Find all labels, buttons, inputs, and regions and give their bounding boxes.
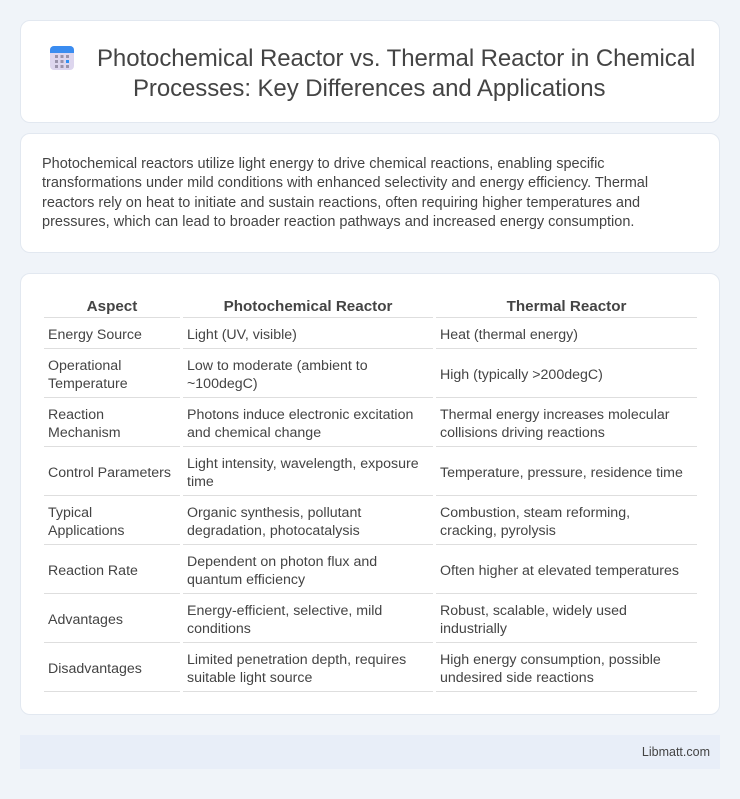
row: reaction mechanism: Photons induce electronic excitation (187, 407, 413, 423)
row: disadvantages: undesired side reactions (440, 670, 594, 686)
row: reaction mechanism: and chemical change (187, 425, 321, 441)
icon: calendar grid (50, 46, 74, 70)
row: reaction mechanism: collisions driving reactions (440, 425, 605, 441)
row: typical applications: Organic synthesis, pollutant (187, 505, 361, 521)
row: disadvantages: Disadvantages (48, 661, 142, 677)
row: advantages: Advantages (48, 612, 123, 628)
row: reaction rate (44, 554, 697, 594)
comparison table (44, 298, 697, 692)
row: typical applications (44, 505, 697, 545)
row: reaction mechanism: Reaction (48, 407, 104, 423)
row: control parameters: Light intensity, wavelength, exposure (187, 456, 419, 472)
table header (44, 298, 697, 318)
row: operational temperature: ~100degC) (187, 376, 258, 392)
row: reaction mechanism: Thermal energy increases molecular (440, 407, 669, 423)
row: reaction rate: Dependent on photon flux and (187, 554, 377, 570)
row: operational temperature (44, 358, 697, 398)
row: typical applications: Combustion, steam reforming, (440, 505, 630, 521)
summary text: Photochemical reactors utilize light energy to drive chemical reactions, enabling specific (42, 156, 605, 172)
row: control parameters: Control Parameters (48, 465, 171, 481)
row: typical applications: Applications (48, 523, 125, 539)
row: advantages: conditions (187, 621, 251, 637)
row: reaction mechanism: Mechanism (48, 425, 121, 441)
row: typical applications: cracking, pyrolysis (440, 523, 556, 539)
title: Processes: Key Differences and Applications (133, 75, 605, 102)
row: disadvantages: Limited penetration depth, requires (187, 652, 406, 668)
row: energy source: Light (UV, visible) (187, 327, 297, 343)
summary card (20, 133, 720, 253)
row: operational temperature: Low to moderate (ambient to (187, 358, 368, 374)
row: disadvantages: suitable light source (187, 670, 312, 686)
title (97, 45, 695, 102)
table header: Photochemical Reactor (224, 298, 392, 315)
row: control parameters: Temperature, pressure, residence time (440, 465, 683, 481)
row: reaction rate: Reaction Rate (48, 563, 138, 579)
table header: Aspect (87, 298, 137, 315)
row: advantages (44, 603, 697, 643)
row: operational temperature: Temperature (48, 376, 128, 392)
row: energy source (44, 327, 697, 349)
title: Photochemical Reactor vs. Thermal Reactor in Chemical (97, 45, 695, 72)
summary text (42, 156, 648, 230)
row: energy source: Energy Source (48, 327, 142, 343)
row: typical applications: Typical (48, 505, 92, 521)
row: energy source: Heat (thermal energy) (440, 327, 578, 343)
row: disadvantages: High energy consumption, possible (440, 652, 661, 668)
row: reaction rate: Often higher at elevated temperatures (440, 563, 679, 579)
summary text: reactors rely on heat to initiate and sustain reactions, often requiring higher temperatures and (42, 195, 640, 211)
table card (20, 273, 720, 715)
footer credit: Libmatt.com (642, 745, 710, 759)
header card (20, 20, 720, 123)
row: reaction rate: quantum efficiency (187, 572, 305, 588)
footer bar (20, 735, 720, 769)
summary text: pressures, which can lead to broader reaction pathways and increased energy consumption. (42, 214, 634, 230)
row: advantages: industrially (440, 621, 507, 637)
summary text: transformations under mild conditions with enhanced selectivity and energy efficiency. Thermal (42, 175, 648, 191)
row: advantages: Energy-efficient, selective, mild (187, 603, 382, 619)
row: typical applications: degradation, photocatalysis (187, 523, 360, 539)
row: control parameters: time (187, 474, 214, 490)
row: operational temperature: Operational (48, 358, 121, 374)
row: operational temperature: High (typically >200degC) (440, 367, 603, 383)
row: disadvantages (44, 652, 697, 692)
row: advantages: Robust, scalable, widely used (440, 603, 627, 619)
row: reaction mechanism (44, 407, 697, 447)
table header: Thermal Reactor (507, 298, 626, 315)
row: control parameters (44, 456, 697, 496)
